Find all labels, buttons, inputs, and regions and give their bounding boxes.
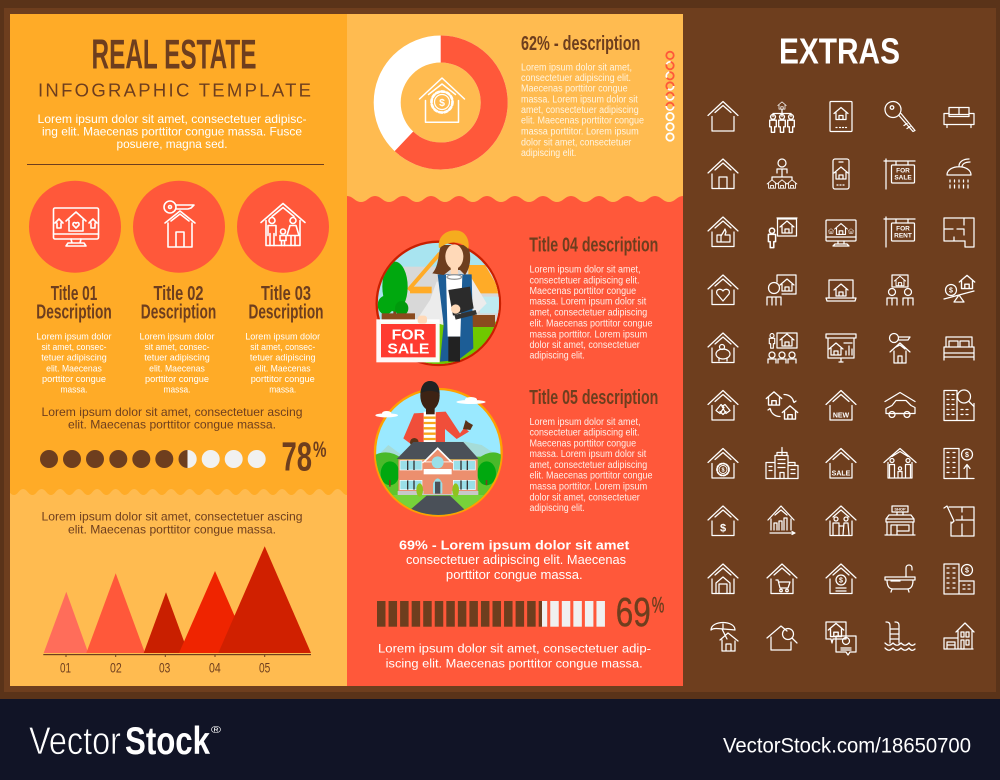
icon: building money xyxy=(944,564,974,594)
icon: house exchange xyxy=(766,392,798,419)
illustration: man behind house xyxy=(375,381,502,518)
body text: Lorem ipsum dolor xyxy=(245,332,320,342)
icon: house dollar: $ xyxy=(720,522,726,534)
icon: presentation to audience xyxy=(768,333,797,363)
footer text in middle column: iscing elit. Maecenas porttitor congue massa. xyxy=(386,657,643,671)
icon: house with door xyxy=(708,159,738,188)
text above chart xyxy=(42,510,302,536)
body text: title 05: massa. Lorem ipsum dolor sit xyxy=(530,449,646,460)
icon: for rent sign xyxy=(884,217,915,247)
icon: sofa xyxy=(944,108,974,128)
feature 01: circle icon, title, text xyxy=(29,181,121,396)
icon: shop: SHOP xyxy=(894,506,906,512)
icon: agent over houses xyxy=(767,159,797,188)
icon: phone xyxy=(833,159,849,189)
body text: title 04: Lorem ipsum dolor sit amet, xyxy=(530,265,640,276)
feature 02: circle icon, title, text xyxy=(133,181,225,396)
icon: house with piggy bank xyxy=(708,333,738,362)
image id: VectorStock.com/18650700 xyxy=(723,734,971,758)
icon: house sale xyxy=(826,448,856,478)
body text: title 05 xyxy=(530,417,652,514)
body text: sit amet, consec- xyxy=(42,342,106,353)
footer text in middle column: Lorem ipsum dolor sit amet, consectetuer adip- xyxy=(378,642,651,656)
icon: house gear dollar: $ xyxy=(721,468,725,474)
heading: Title 01 xyxy=(51,283,97,305)
body text: 62% xyxy=(521,62,644,159)
dot meter 78% xyxy=(40,450,266,468)
text above dot meter: Lorem ipsum dolor sit amet, consectetuer ascing xyxy=(42,405,302,419)
icon: house sale: SALE xyxy=(832,470,851,478)
body text: tetuer adipiscing xyxy=(41,353,107,364)
panel: left column xyxy=(0,14,352,686)
footer text in middle column xyxy=(378,642,651,671)
icon: for sale sign: SALE xyxy=(894,174,912,182)
body text: title 04: elit. Maecenas porttitor congue xyxy=(530,318,652,329)
icon: shop xyxy=(885,506,915,535)
triangle chart: 04 xyxy=(209,659,221,675)
icon: house arrow up xyxy=(708,564,738,594)
body text: Lorem ipsum dolor xyxy=(140,332,214,342)
stat: 69%: 69 xyxy=(616,589,651,635)
heading: title 05: Title 05 description xyxy=(529,387,658,409)
body text: title 04: Maecenas porttitor congue xyxy=(530,286,636,297)
icon: speech bubbles xyxy=(826,622,856,655)
logo: VectorStock: ® xyxy=(211,725,222,736)
callout text: 69% xyxy=(399,537,630,582)
intro text: posuere, magna sed. xyxy=(116,137,228,151)
panel: middle column xyxy=(340,14,704,686)
body text: title 05: dolor sit amet, consectetuer xyxy=(530,492,641,503)
intro text: ing elit. Maecenas porttitor congue massa. Fusce xyxy=(42,125,302,139)
body text: sit amet, consec- xyxy=(250,342,315,353)
icon: for rent sign: RENT xyxy=(894,232,912,240)
body text: porttitor congue xyxy=(251,374,315,385)
feature 01: circle icon, title, text: Description xyxy=(36,302,112,324)
callout text: 69%: porttitor congue massa. xyxy=(446,567,583,582)
icon: house search xyxy=(767,626,797,650)
icon: key above house xyxy=(164,201,195,247)
icon: key xyxy=(885,102,915,132)
icon: laptop xyxy=(826,280,856,301)
body text: tetuer adipiscing xyxy=(250,353,316,364)
body text: elit. Maecenas xyxy=(149,363,205,374)
text above dot meter: elit. Maecenas porttitor congue massa. xyxy=(68,417,276,431)
body text: 62%: dolor sit amet, consectetuer xyxy=(521,137,632,148)
icon: monitor house xyxy=(54,208,98,246)
feature 03: circle icon, title, text xyxy=(237,181,329,396)
body text: massa. xyxy=(60,384,88,396)
body text: title 05: Maecenas porttitor congue xyxy=(530,438,636,449)
heading: Title 03 xyxy=(261,283,311,305)
body text: sit amet, consec- xyxy=(144,342,210,353)
icon: building search xyxy=(944,390,974,420)
icon: key over house xyxy=(890,334,910,363)
title: REAL ESTATE xyxy=(92,30,256,78)
text above chart: Lorem ipsum dolor sit amet, consectetuer ascing xyxy=(42,510,302,524)
body text: title 04: massa porttitor. Lorem ipsum xyxy=(530,329,647,340)
intro text: Lorem ipsum dolor sit amet, consectetuer adipisc- xyxy=(38,112,307,126)
stat: 69%: % xyxy=(652,592,664,617)
icon: house handshake xyxy=(708,390,738,420)
body text: massa. xyxy=(269,384,296,396)
body text: title 04: amet, consectetuer adipiscing xyxy=(530,308,647,319)
icon: bathtub xyxy=(885,565,915,592)
icon: umbrella house xyxy=(711,622,738,651)
body text: title 04: consectetuer adipiscing elit. xyxy=(530,275,640,286)
illustration: agent with for-sale sign: FOR xyxy=(392,327,425,343)
body text: title 05: adipiscing elit. xyxy=(530,503,585,514)
body text: Lorem ipsum dolor xyxy=(36,332,112,342)
ring chain indicator xyxy=(665,52,675,141)
icon: seesaw money house: $ xyxy=(949,288,953,294)
feature 03: circle icon, title, text: Description xyxy=(248,302,324,324)
triangle chart: 05 xyxy=(259,659,270,675)
icon: floor plan xyxy=(944,218,974,247)
logo: VectorStock xyxy=(29,720,222,763)
icon: house with gear: $ xyxy=(439,97,445,109)
icon: house dollar xyxy=(708,506,738,536)
icon: couple house xyxy=(826,506,856,536)
body text: tetuer adipiscing xyxy=(144,353,210,364)
body text: title 05: massa porttitor. Lorem ipsum xyxy=(530,482,647,493)
body text: title 05: elit. Maecenas porttitor congue xyxy=(530,471,652,482)
logo: VectorStock: Stock xyxy=(125,720,210,763)
illustration: agent with for-sale sign: SALE xyxy=(387,341,430,357)
icon: family in house xyxy=(261,204,305,246)
body text: title 05: amet, consectetuer adipiscing xyxy=(530,460,647,471)
icon: house new xyxy=(826,390,856,420)
body text: title 04: adipiscing elit. xyxy=(530,351,585,362)
icon: pool ladder xyxy=(885,622,915,650)
icon: projector screen xyxy=(826,334,856,362)
icon: family house xyxy=(884,448,916,478)
extras icon grid xyxy=(708,102,975,655)
body text: elit. Maecenas xyxy=(255,363,311,374)
body text: title 04 xyxy=(530,265,652,362)
body text: 62%: Maecenas porttitor congue xyxy=(521,84,628,95)
icon: for sale sign: FOR xyxy=(896,168,910,174)
body text: 62%: consectetuer adipiscing elit. xyxy=(521,73,631,84)
body text: 62%: massa porttitor. Lorem ipsum xyxy=(521,127,639,138)
heading: title 04: Title 04 description xyxy=(529,235,658,257)
triangle chart: 02 xyxy=(110,659,122,675)
icon: tablet xyxy=(830,102,852,132)
body text: massa. xyxy=(164,384,190,396)
icon: presenter with board xyxy=(768,218,797,248)
icon: house with garage xyxy=(944,623,974,649)
icon: for sale sign xyxy=(884,159,915,189)
logo: VectorStock: Vector xyxy=(29,720,121,763)
icon: plan with pencil xyxy=(944,506,974,536)
body text: title 04: massa. Lorem ipsum dolor sit xyxy=(530,297,646,308)
text above dot meter xyxy=(42,405,302,431)
panel heading: extras: EXTRAS xyxy=(779,30,900,71)
icon: house growth chart xyxy=(768,506,795,534)
icon: house new: NEW xyxy=(833,412,850,420)
body text: title 05: consectetuer adipiscing elit. xyxy=(530,428,640,439)
body text: 62%: adipiscing elit. xyxy=(521,148,576,159)
body text: title 04: dolor sit amet, consectetuer xyxy=(530,340,641,351)
icon: house cart xyxy=(767,564,797,594)
subtitle: INFOGRAPHIC TEMPLATE xyxy=(38,80,311,101)
triangle chart: 01 xyxy=(60,659,71,675)
body text xyxy=(140,332,214,396)
text above chart: elit. Maecenas porttitor congue massa. xyxy=(68,522,276,536)
stat: 78%: % xyxy=(313,437,326,462)
bar meter 69% xyxy=(377,601,605,627)
icon: house with heart xyxy=(708,275,738,304)
stat: 78%: 78 xyxy=(282,434,312,480)
icon: building dollar up xyxy=(944,448,974,478)
icon: agent bust with board xyxy=(767,275,796,305)
callout text: 69%: 69% - Lorem ipsum dolor sit amet xyxy=(399,537,630,552)
feature 02: circle icon, title, text: Description xyxy=(141,302,216,324)
icon: org chart people xyxy=(770,102,794,132)
icon: seesaw money house xyxy=(944,275,975,302)
clouds xyxy=(375,397,486,417)
body text: 62%: massa. Lorem ipsum dolor sit xyxy=(521,94,638,105)
icon: bed xyxy=(944,337,974,360)
intro text xyxy=(38,112,307,151)
body text: title 05: Lorem ipsum dolor sit amet, xyxy=(530,417,640,428)
body text xyxy=(245,332,320,396)
icon: couple with house xyxy=(887,275,913,305)
icon: for rent sign: FOR xyxy=(896,226,910,232)
icon: car under roof xyxy=(885,392,915,418)
triangle chart: 03 xyxy=(159,659,170,675)
icon: building money: $ xyxy=(965,568,969,574)
icon: house coin: $ xyxy=(839,578,843,584)
icon: house gear dollar xyxy=(708,448,738,478)
body text: 62%: Lorem ipsum dolor sit amet, xyxy=(521,62,632,73)
icon: shower xyxy=(947,159,971,188)
body text: porttitor congue xyxy=(145,374,209,385)
icon: monitor house xyxy=(826,220,856,246)
footer band xyxy=(0,699,1000,780)
body text: 62%: amet, consectetuer adipiscing xyxy=(521,105,639,116)
heading: 62% description: 62% - description xyxy=(521,33,640,55)
illustration: agent with for-sale sign xyxy=(376,230,502,365)
icon: house xyxy=(708,102,738,131)
body text xyxy=(36,332,112,396)
icon: house coin xyxy=(826,564,856,594)
body text: 62%: elit. Maecenas porttitor congue xyxy=(521,116,644,127)
body text: porttitor congue xyxy=(42,374,106,385)
icon: city xyxy=(766,448,798,478)
heading: Title 02 xyxy=(154,283,204,305)
donut chart 62% xyxy=(387,49,494,156)
icon: building dollar up: $ xyxy=(965,452,969,459)
callout text: 69%: consectetuer adipiscing elit. Maecenas xyxy=(406,552,626,567)
triangle chart xyxy=(43,546,311,675)
body text: elit. Maecenas xyxy=(46,363,102,374)
icon: house with thumb xyxy=(708,217,738,246)
